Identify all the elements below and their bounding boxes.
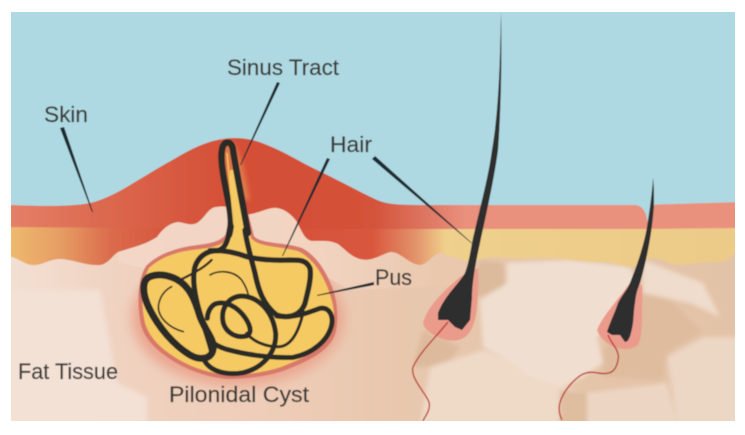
label: skin: Skin <box>44 102 88 127</box>
pale tissue under the red dermis <box>118 207 470 290</box>
skin fat layer <box>5 225 741 267</box>
cyst sac <box>138 170 337 379</box>
label: pus: Pus <box>375 265 412 290</box>
leader: sinus tract <box>240 82 280 165</box>
skin top layer <box>5 138 741 229</box>
tangled hair in cyst <box>144 230 332 374</box>
hair root line: small <box>559 335 618 420</box>
follicle halo: small <box>597 283 642 349</box>
leader: skin <box>60 127 93 212</box>
label: hair: Hair <box>330 132 372 157</box>
leader: hair to cyst <box>282 158 330 256</box>
hair loop in sinus tract <box>221 142 248 235</box>
leader: pus <box>317 282 374 296</box>
fat tissue <box>5 215 741 425</box>
follicle halo: large <box>423 268 478 341</box>
orange glow at tip <box>222 140 250 200</box>
glow around cyst <box>132 250 344 386</box>
leader: hair to follicle <box>372 156 472 243</box>
hair: small <box>607 178 654 342</box>
label: pilonidal cyst: Pilonidal Cyst <box>169 382 309 407</box>
hair root line: large <box>413 322 448 421</box>
label: fat tissue: Fat Tissue <box>18 359 118 384</box>
hair: large <box>438 12 501 330</box>
tract highlight <box>227 153 234 225</box>
label: sinus tract: Sinus Tract <box>227 55 339 80</box>
notch at small hair exit <box>636 198 665 226</box>
